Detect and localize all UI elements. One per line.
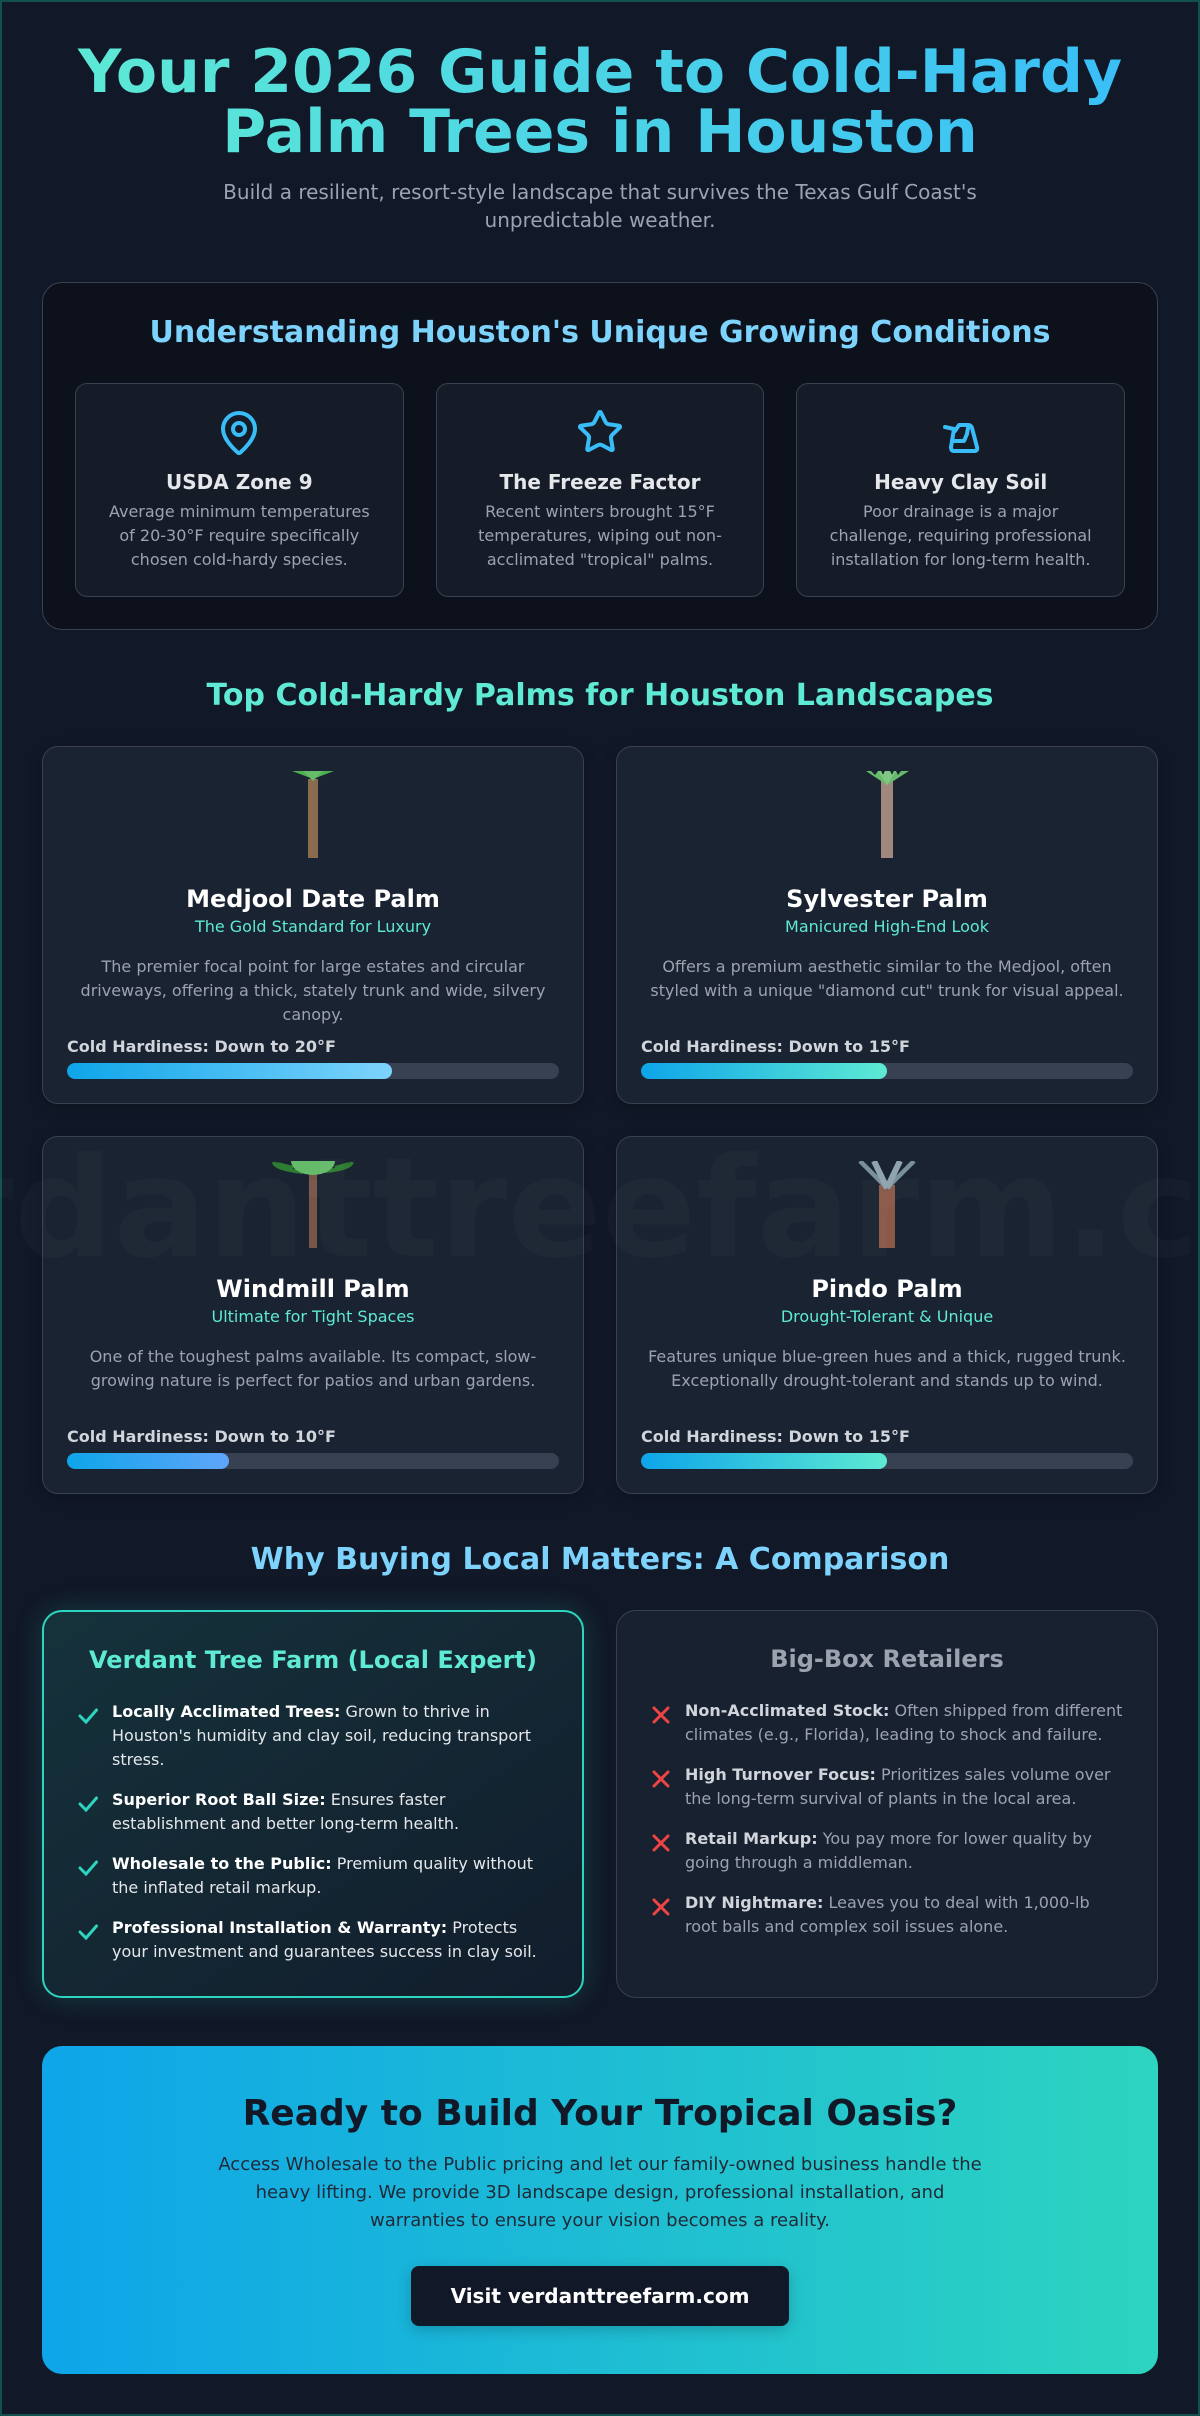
hardiness bar: [67, 1453, 559, 1469]
palm description: Offers a premium aesthetic similar to the Medjool, often: [662, 957, 1112, 976]
card title: Heavy Clay Soil: [874, 470, 1047, 494]
heading: growing conditions: Understanding Houston's Unique Growing Conditions: [149, 315, 1050, 350]
icon: check: [78, 1796, 98, 1812]
card text: chosen cold-hardy species.: [131, 550, 348, 569]
icon: soil jug: [943, 423, 980, 453]
icon: star: [578, 410, 622, 452]
benefit: root ball: Superior Root Ball Size: Ensures faster: [112, 1790, 445, 1809]
card text: installation for long-term health.: [831, 550, 1090, 569]
card text: Average minimum temperatures: [109, 502, 370, 521]
call to action: [42, 2046, 1158, 2374]
hardiness label: Cold Hardiness: Down to 15°F: [641, 1037, 910, 1056]
card: Pindo palm: [616, 1136, 1158, 1494]
icon: cross: [652, 1834, 670, 1852]
panel: big-box retailers: [616, 1610, 1158, 1998]
drawback: turnover: the long-term survival of plants in the local area.: [685, 1789, 1076, 1808]
drawback: DIY: root balls and complex soil issues alone.: [685, 1917, 1008, 1936]
CTA text: Access Wholesale to the Public pricing and let our family-owned business handle the: [218, 2154, 982, 2175]
card title: USDA Zone 9: [166, 470, 313, 494]
title: Palm Trees in Houston: [222, 97, 978, 167]
card text: [830, 502, 1092, 569]
benefit: acclimated trees: stress.: [112, 1750, 164, 1769]
CTA text: [218, 2154, 982, 2231]
hardiness label: Cold Hardiness: Down to 20°F: [67, 1037, 336, 1056]
drawback: markup: going through a middleman.: [685, 1853, 913, 1872]
card: clay soil: [796, 383, 1125, 597]
palm description: Exceptionally drought-tolerant and stands up to wind.: [671, 1371, 1103, 1390]
subtitle: Build a resilient, resort-style landscape that survives the Texas Gulf Coast's: [223, 180, 977, 204]
benefit: installation: Professional Installation & Warranty: Protects: [112, 1918, 517, 1937]
drawback: markup: [652, 1829, 1092, 1872]
card text: acclimated "tropical" palms.: [487, 550, 713, 569]
subtitle: unpredictable weather.: [485, 208, 715, 232]
palm description: [650, 957, 1124, 1000]
CTA button: Visit verdanttreefarm.com: [451, 2284, 749, 2308]
CTA text: warranties to ensure your vision becomes a reality.: [370, 2210, 830, 2231]
card: Sylvester palm: [616, 746, 1158, 1104]
icon: check: [78, 1924, 98, 1940]
icon: cross: [652, 1770, 670, 1788]
benefit: root ball: [78, 1790, 459, 1833]
CTA button: [411, 2266, 789, 2326]
palm description: One of the toughest palms available. Its compact, slow-: [90, 1347, 536, 1366]
palm name: Pindo Palm: [811, 1275, 963, 1303]
palm tagline: Ultimate for Tight Spaces: [211, 1307, 415, 1326]
card text: Poor drainage is a major: [863, 502, 1058, 521]
benefit: acclimated trees: Locally Acclimated Trees: Grown to thrive in: [112, 1702, 490, 1721]
icon: Windmill palm: [272, 1161, 354, 1248]
card text: challenge, requiring professional: [830, 526, 1092, 545]
drawback: markup: Retail Markup: You pay more for lower quality by: [685, 1829, 1092, 1848]
palm name: Windmill Palm: [216, 1275, 410, 1303]
icon: check: [78, 1860, 98, 1876]
icon: Pindo palm: [858, 1161, 916, 1248]
palm tagline: Manicured High-End Look: [785, 917, 989, 936]
palm description: driveways, offering a thick, stately trunk and wide, silvery: [81, 981, 545, 1000]
CTA heading: Ready to Build Your Tropical Oasis?: [243, 2093, 957, 2134]
panel: Verdant Tree Farm: [42, 1610, 584, 1998]
card: USDA zone: [75, 383, 404, 597]
subtitle: [223, 180, 977, 232]
palm description: [81, 957, 545, 1024]
hardiness label: Cold Hardiness: Down to 10°F: [67, 1427, 336, 1446]
heading: top palms: Top Cold-Hardy Palms for Houston Landscapes: [206, 678, 994, 713]
title: Your 2026 Guide to Cold-Hardy: [78, 37, 1122, 107]
card text: [478, 502, 722, 569]
title: [42, 42, 1158, 162]
benefit: root ball: establishment and better long-term health.: [112, 1814, 459, 1833]
icon: check: [78, 1708, 98, 1724]
palm description: growing nature is perfect for patios and urban gardens.: [91, 1371, 535, 1390]
palm description: [90, 1347, 536, 1390]
card text: of 20-30°F require specifically: [119, 526, 359, 545]
benefit: acclimated trees: [78, 1702, 531, 1769]
card: Medjool date palm: [42, 746, 584, 1104]
palm name: Medjool Date Palm: [186, 885, 440, 913]
benefit: installation: your investment and guarantees success in clay soil.: [112, 1942, 537, 1961]
drawback: turnover: High Turnover Focus: Prioritizes sales volume over: [685, 1765, 1110, 1784]
benefit: wholesale: [78, 1854, 533, 1897]
benefit: installation: [78, 1918, 537, 1961]
palm description: The premier focal point for large estates and circular: [102, 957, 524, 976]
CTA text: heavy lifting. We provide 3D landscape design, professional installation, and: [256, 2182, 944, 2203]
drawback: DIY: [652, 1893, 1090, 1936]
icon: map pin: [221, 411, 257, 456]
drawback: stock: Non-Acclimated Stock: Often shipped from different: [685, 1701, 1122, 1720]
palm description: canopy.: [283, 1005, 343, 1024]
card text: Recent winters brought 15°F: [485, 502, 715, 521]
hardiness label: Cold Hardiness: Down to 15°F: [641, 1427, 910, 1446]
panel heading: Verdant Tree Farm (Local Expert): [89, 1646, 537, 1674]
palm name: Sylvester Palm: [786, 885, 988, 913]
benefit: acclimated trees: Houston's humidity and clay soil, reducing transport: [112, 1726, 531, 1745]
hardiness bar: [641, 1453, 1133, 1469]
panel heading: Big-Box Retailers: [770, 1645, 1004, 1673]
card text: temperatures, wiping out non-: [478, 526, 722, 545]
card: freeze factor: [436, 383, 764, 597]
card text: [109, 502, 370, 569]
palm description: styled with a unique "diamond cut" trunk for visual appeal.: [650, 981, 1124, 1000]
palm tagline: The Gold Standard for Luxury: [195, 917, 431, 936]
hardiness bar: [641, 1063, 1133, 1079]
drawback: stock: climates (e.g., Florida), leading to shock and failure.: [685, 1725, 1102, 1744]
panel: growing conditions: [42, 282, 1158, 630]
palm tagline: Drought-Tolerant & Unique: [781, 1307, 993, 1326]
icon: Medjool palm: [292, 771, 334, 858]
icon: cross: [652, 1898, 670, 1916]
drawback: DIY: DIY Nightmare: Leaves you to deal with 1,000-lb: [685, 1893, 1090, 1912]
benefit: wholesale: the inflated retail markup.: [112, 1878, 321, 1897]
card: Windmill palm: [42, 1136, 584, 1494]
heading: comparison: Why Buying Local Matters: A Comparison: [251, 1542, 949, 1577]
icon: cross: [652, 1706, 670, 1724]
drawback: stock: [652, 1701, 1122, 1744]
palm description: Features unique blue-green hues and a thick, rugged trunk.: [648, 1347, 1126, 1366]
benefit: wholesale: Wholesale to the Public: Premium quality without: [112, 1854, 533, 1873]
drawback: turnover: [652, 1765, 1110, 1808]
icon: Sylvester palm: [866, 771, 909, 858]
hardiness bar: [67, 1063, 559, 1079]
card title: The Freeze Factor: [500, 470, 700, 494]
palm description: [648, 1347, 1126, 1390]
